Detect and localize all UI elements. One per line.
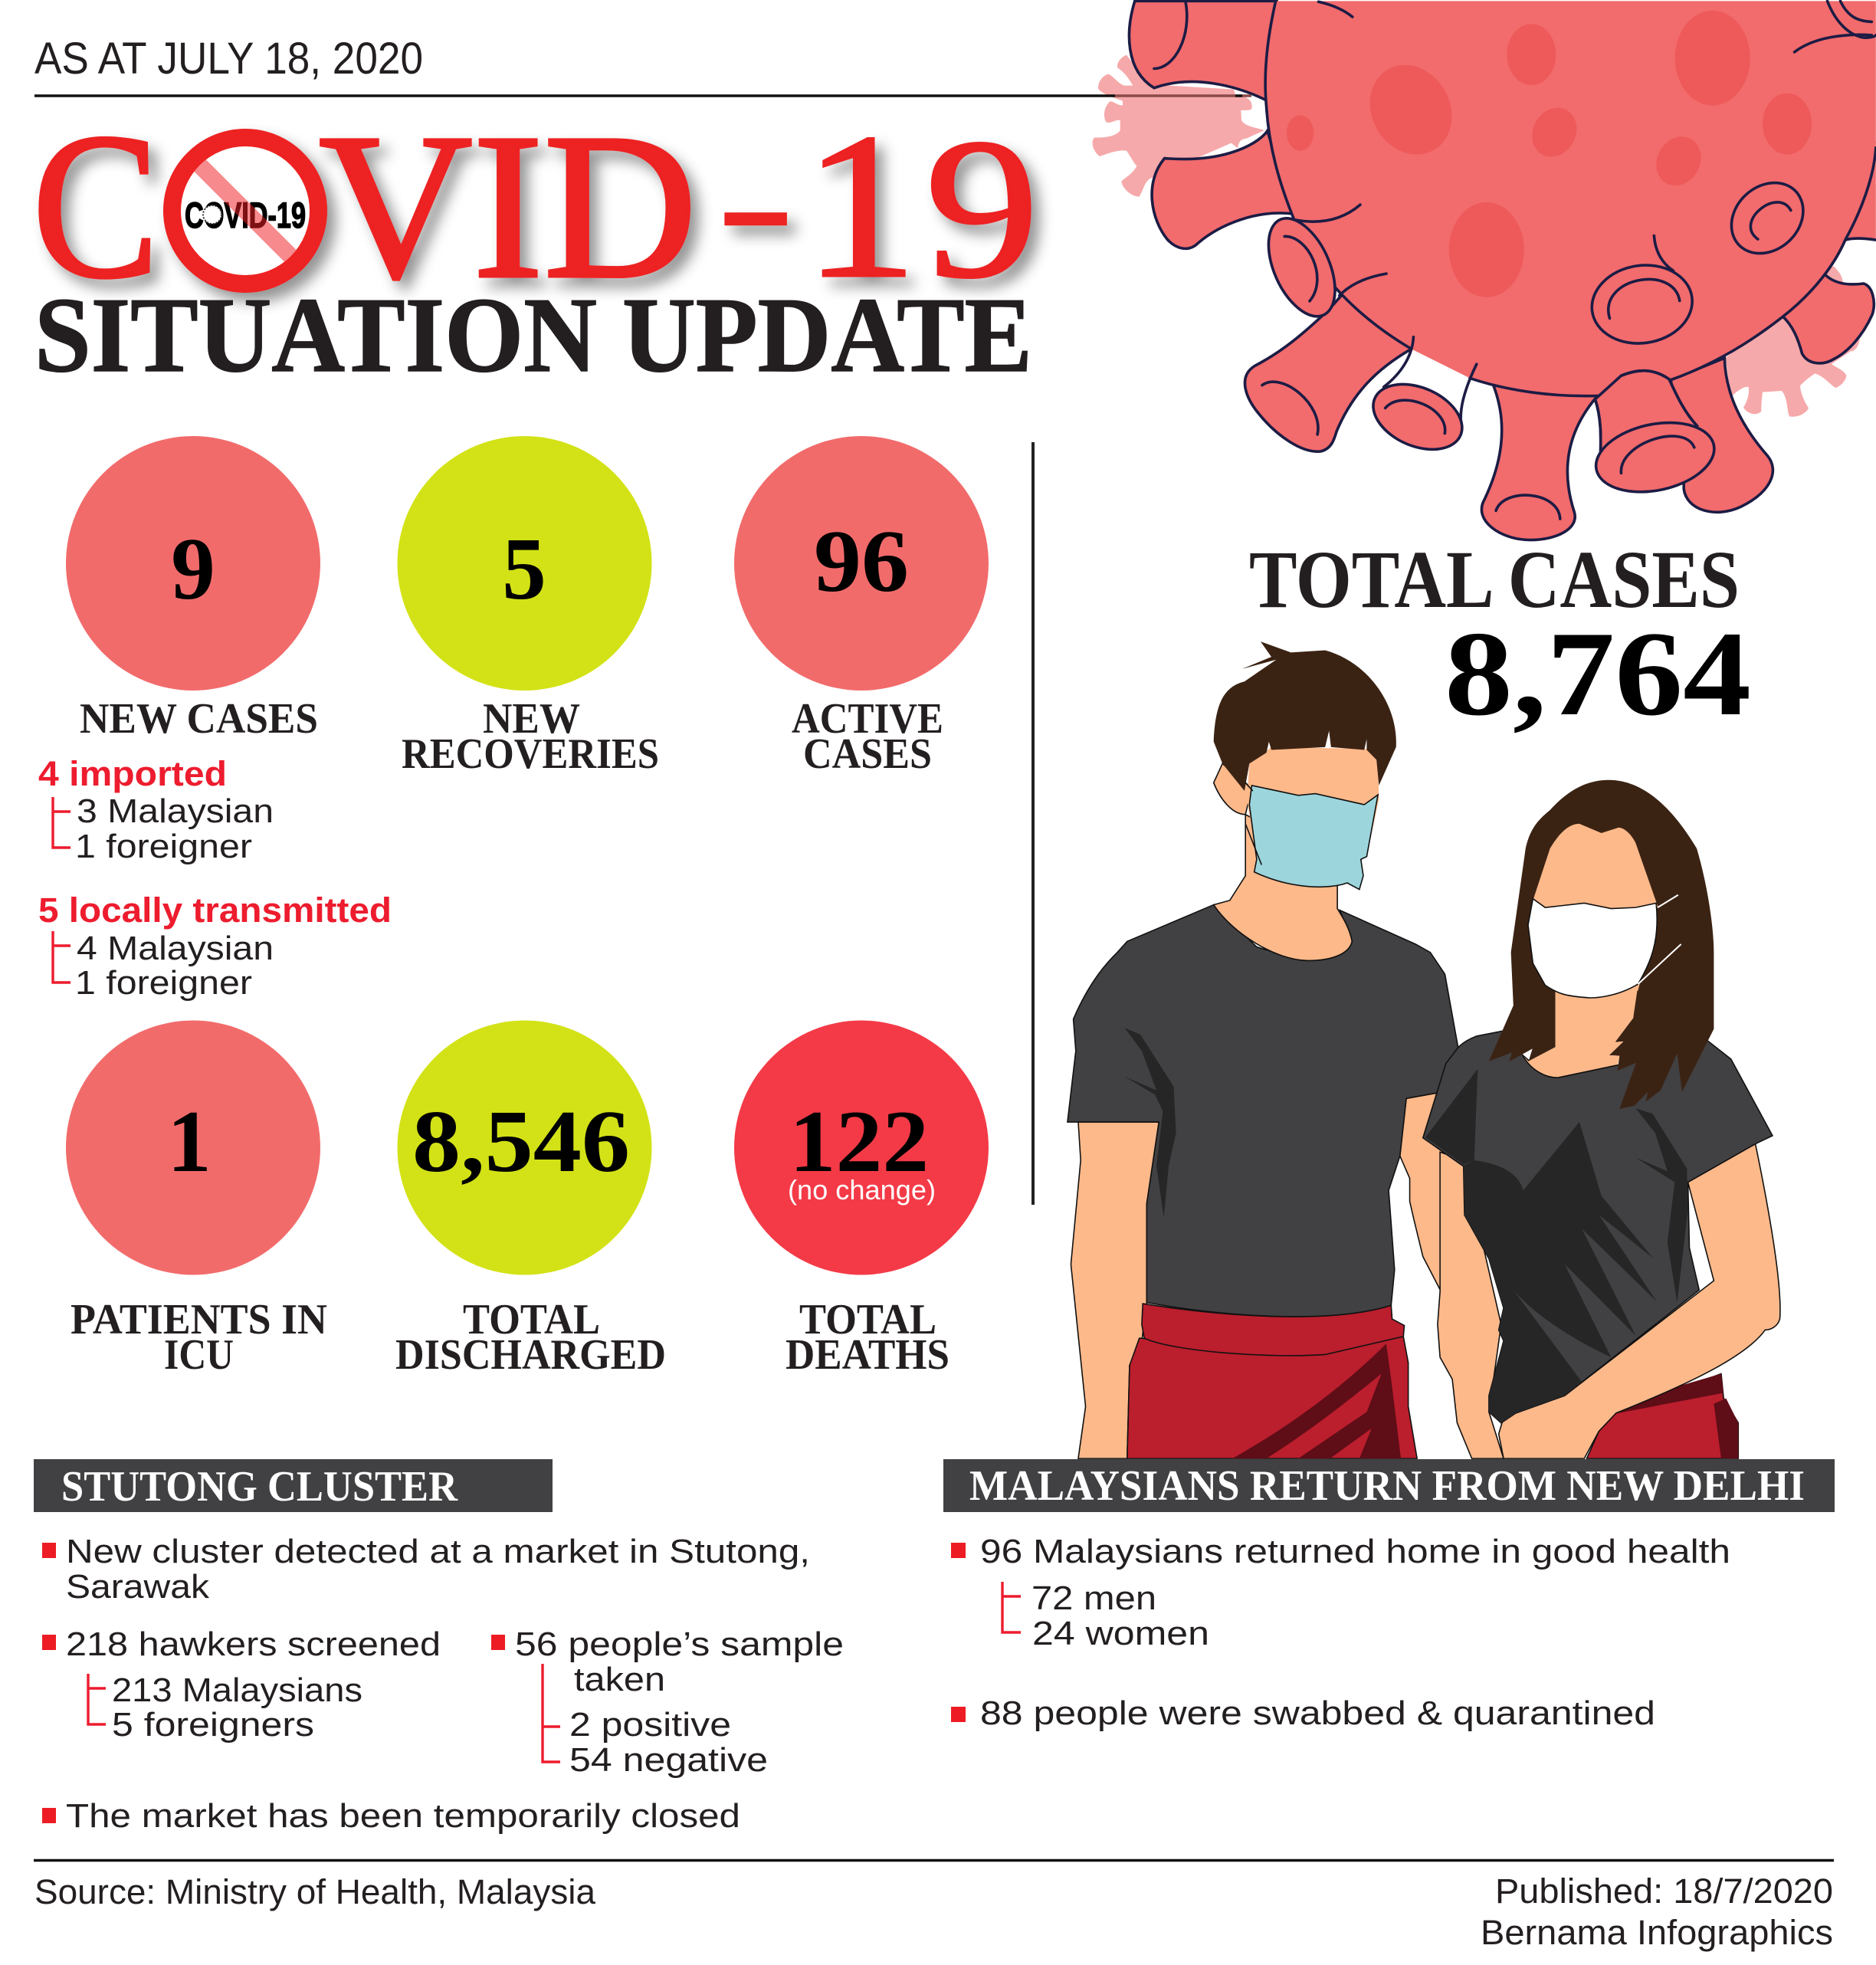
- stat: new cases: [66, 436, 320, 743]
- bullet: samples: 56 people’s sample: [515, 1625, 844, 1663]
- stat: active cases: [734, 436, 989, 778]
- man: [1068, 641, 1458, 1458]
- sign text: COVID-19: [185, 195, 306, 235]
- spike upper left: [1129, 1, 1277, 100]
- spike cap lower: [1355, 372, 1481, 461]
- bullet: hawkers: 218 hawkers screened: [66, 1625, 441, 1663]
- body outlines and details: [1154, 1, 1876, 519]
- title: COVID-19: C: [32, 90, 159, 321]
- bullet: samples: 2 positive: [569, 1706, 731, 1744]
- bullet: returned home: 72 men: [1031, 1580, 1156, 1617]
- title: COVID-19: 9: [925, 97, 1039, 320]
- title: COVID-19: 1: [803, 90, 918, 321]
- bullet: samples: 54 negative: [569, 1741, 768, 1779]
- new cases breakdown: 4 Malaysian: [77, 930, 274, 967]
- new cases breakdown: 4 imported: [38, 754, 227, 793]
- stat: total deaths: TOTAL: [799, 1296, 936, 1343]
- spike back right lower: [1671, 358, 1773, 512]
- stat: patients in ICU: [66, 1021, 327, 1379]
- bullet: hawkers: 213 Malaysians: [112, 1671, 362, 1709]
- stat: patients in ICU: PATIENTS IN: [71, 1296, 327, 1343]
- illustration: coronavirus: [1129, 1, 1876, 540]
- bullet: hawkers: [42, 1625, 441, 1744]
- virus body: [1265, 1, 1876, 396]
- body surface spots: [1287, 11, 1812, 297]
- total cases: TOTAL CASES: [1249, 535, 1740, 625]
- title: COVID-19: -: [719, 131, 792, 280]
- stat: patients in ICU: 1: [167, 1093, 212, 1190]
- icon: no-COVID sign: [185, 157, 306, 264]
- stat: new recoveries: [397, 436, 659, 778]
- stat: total deaths: (no change): [788, 1174, 936, 1206]
- stat: total discharged: DISCHARGED: [395, 1331, 666, 1379]
- heading bar: MALAYSIANS RETURN FROM NEW DELHI: [969, 1462, 1805, 1510]
- bullet: swabbed: 88 people were swabbed & quarantined: [980, 1694, 1655, 1732]
- stat: total deaths: DEATHS: [785, 1331, 949, 1379]
- stat: new recoveries: NEW: [483, 695, 580, 743]
- bullet: samples: [491, 1625, 844, 1779]
- panel: Malaysians return from New Delhi: [943, 1459, 1835, 1732]
- stat: active cases: CASES: [803, 730, 932, 778]
- bullet: new cluster: Sarawak: [66, 1568, 210, 1606]
- faded back spike right: [1726, 266, 1860, 417]
- bullet: market closed: The market has been temporarily closed: [66, 1797, 740, 1835]
- bullet: new cluster: New cluster detected at a market in Stutong,: [66, 1533, 810, 1570]
- illustration: masked couple: [1068, 641, 1780, 1458]
- stat: total discharged: [395, 1021, 666, 1379]
- faded back spike left: [1093, 55, 1264, 197]
- subtitle: SITUATION UPDATE: [34, 276, 1032, 395]
- spike bottom: [1481, 385, 1600, 540]
- spike off-canvas right: [1841, 141, 1876, 240]
- vertical divider: [1031, 442, 1035, 1205]
- new cases breakdown: 1 foreigner: [75, 964, 252, 1002]
- new cases breakdown: 5 locally transmitted: [38, 891, 392, 930]
- spike left: [1152, 131, 1294, 248]
- spike cap front: [1577, 371, 1733, 506]
- bullet: returned home: 24 women: [1032, 1615, 1209, 1652]
- stat: total deaths: 122: [789, 1093, 929, 1190]
- title: COVID-19: VID: [319, 90, 697, 322]
- stat: active cases: ACTIVE: [792, 695, 943, 743]
- stat: new recoveries: RECOVERIES: [402, 730, 659, 778]
- date line: AS AT JULY 18, 2020: [34, 34, 423, 84]
- stat: active cases: 96: [814, 513, 909, 610]
- stat: new recoveries: 5: [502, 520, 546, 618]
- bullet: returned home: [951, 1533, 1730, 1652]
- body ring center: [1579, 258, 1704, 350]
- stat: total discharged: TOTAL: [463, 1296, 600, 1343]
- publication credit: Bernama Infographics: [1481, 1913, 1833, 1952]
- publication credit: [1481, 1872, 1833, 1952]
- bullet: hawkers: 5 foreigners: [112, 1706, 314, 1744]
- stat: new cases: NEW CASES: [80, 695, 318, 743]
- new cases breakdown: [38, 754, 392, 1002]
- new cases breakdown: 3 Malaysian: [77, 792, 274, 830]
- bullet: new cluster: [42, 1533, 810, 1606]
- total cases: 8,764: [1445, 607, 1751, 741]
- header rule: [34, 94, 1251, 97]
- stat: patients in ICU: ICU: [164, 1331, 234, 1379]
- stat: new cases: 9: [171, 520, 215, 618]
- stat: total discharged: 8,546: [412, 1093, 630, 1190]
- body ring right: [1721, 178, 1814, 258]
- title: COVID-19: [32, 90, 1039, 322]
- stat: total deaths: [734, 1021, 989, 1379]
- spike lower left: [1245, 295, 1412, 451]
- new cases breakdown: 1 foreigner: [75, 828, 252, 865]
- panel: Stutong cluster: [34, 1459, 844, 1835]
- spike right: [1782, 273, 1874, 363]
- publication credit: Published: 18/7/2020: [1495, 1872, 1833, 1911]
- spike cap upper: [1256, 214, 1348, 321]
- total cases: [1249, 535, 1751, 741]
- bullet: samples: taken: [574, 1661, 665, 1698]
- bullet: returned home: 96 Malaysians returned home in good health: [980, 1533, 1730, 1570]
- woman: [1423, 780, 1780, 1458]
- heading bar: STUTONG CLUSTER: [61, 1463, 458, 1511]
- source: Source: Ministry of Health, Malaysia: [34, 1872, 596, 1911]
- footer rule: [34, 1859, 1834, 1862]
